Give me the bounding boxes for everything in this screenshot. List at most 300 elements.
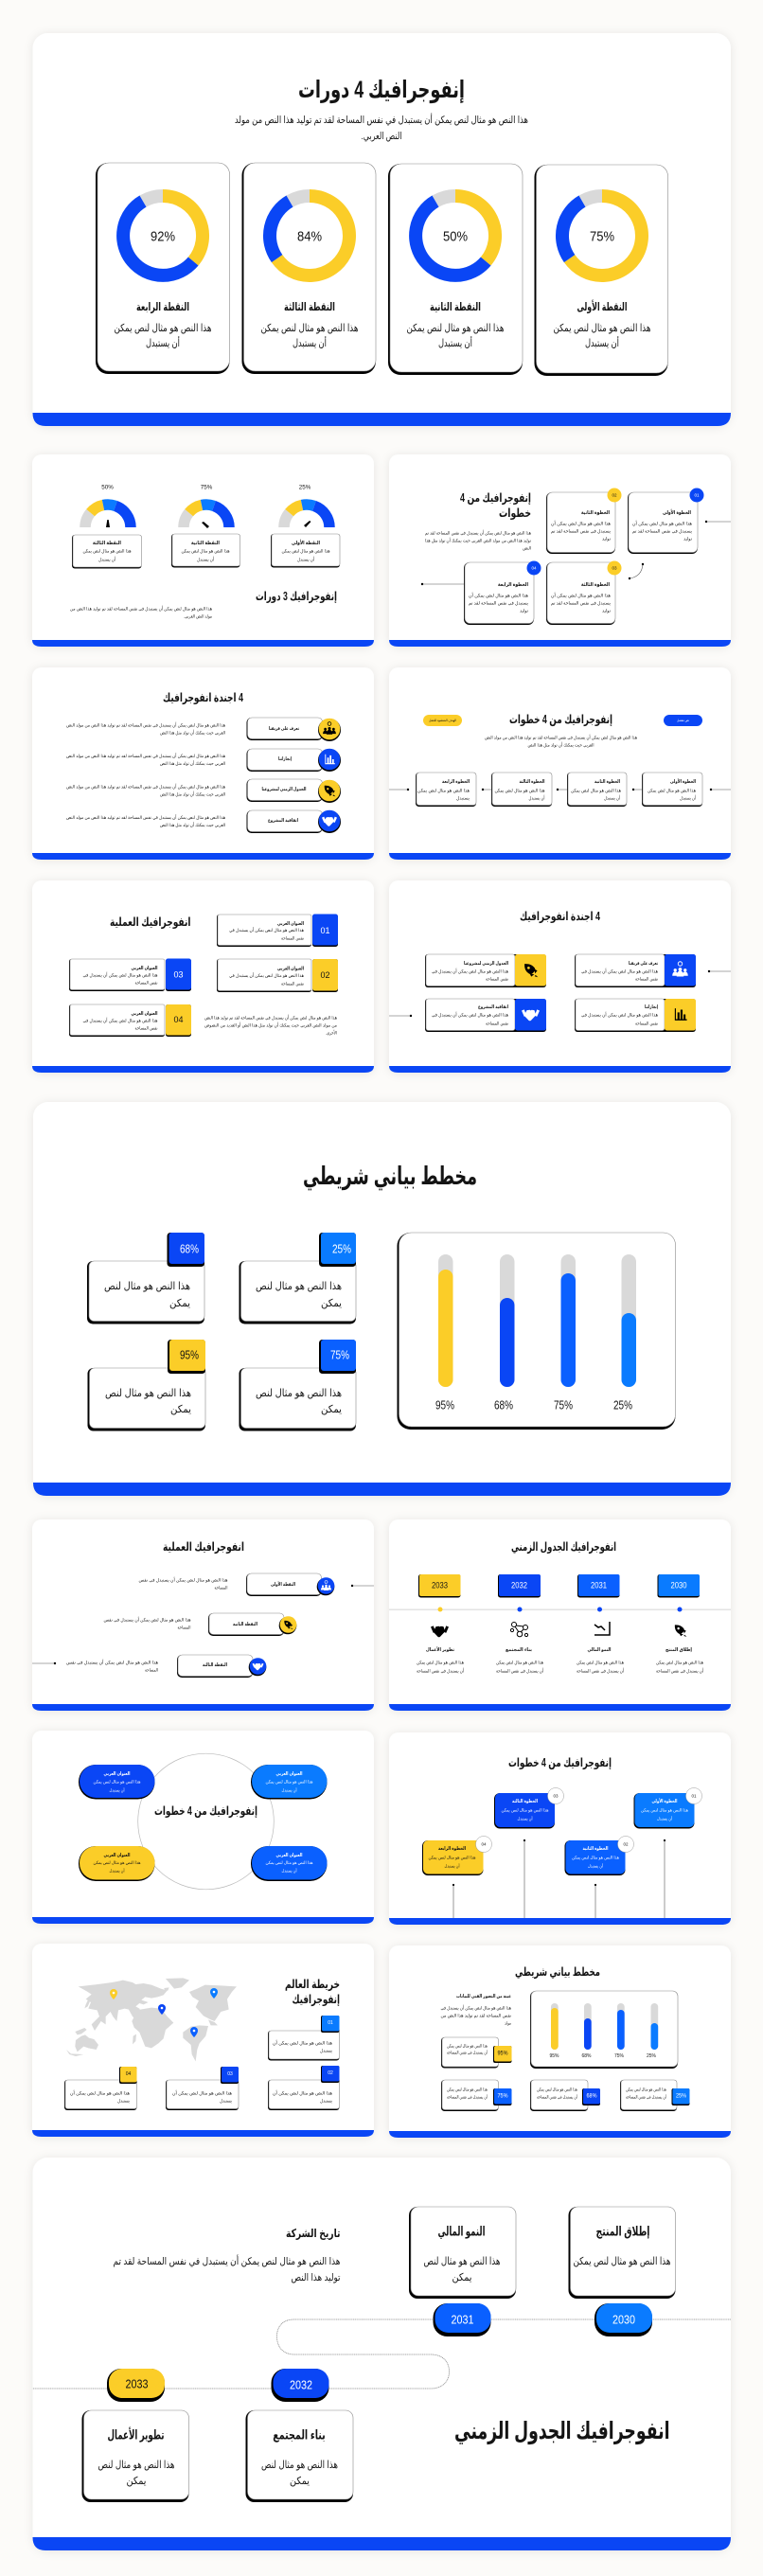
icon: network	[510, 1623, 528, 1637]
item 01: 01	[320, 926, 330, 935]
step card 01: 01	[694, 492, 700, 498]
bar chart card: 75%	[614, 2053, 624, 2059]
stat 25%	[620, 2080, 689, 2111]
pill top right: هذا النص هو مثال لنص يمكن	[265, 1780, 313, 1784]
map card 01	[268, 2016, 339, 2060]
panel: circle 4 steps	[32, 1731, 374, 1924]
stat 95%: أن يستبدل في نفس المساحة	[447, 2049, 488, 2054]
card: business development: يمكن	[127, 2476, 146, 2487]
step 3: أن يستبدل	[528, 795, 545, 801]
step card 02: 02	[612, 492, 617, 498]
gauge: 75%	[171, 485, 240, 568]
text block: هذا النص هو مثال لنص يمكن أن يستبدل في نفس المساحة لقد تم توليد هذا النص من مولد النص	[485, 735, 637, 740]
panel: small bar chart	[389, 1945, 731, 2138]
step 2: الخطوة الثانية	[594, 779, 620, 785]
step card 01: الخطوة الأولى	[663, 508, 691, 516]
agenda card: team: هذا النص هو مثال لنص يمكن أن يستبدل في	[581, 968, 658, 975]
item 01: هذا النص هو مثال لنص يمكن أن يستبدل في	[229, 927, 304, 933]
step 02	[564, 1837, 634, 1875]
card: fourth point 92%: هذا النص هو مثال لنص يمكن	[114, 323, 212, 334]
row 3: الجدول الزمني لمشروعنا	[261, 787, 307, 792]
year 2030: إطلاق المنتج	[665, 1647, 692, 1653]
step 03	[494, 1787, 564, 1829]
gauge: 75%: هذا النص هو مثال لنص يمكن	[182, 549, 230, 555]
item 04: 04	[173, 1015, 184, 1024]
step 3	[491, 773, 552, 807]
map card 03	[166, 2067, 239, 2110]
bar chart card: 25%	[613, 1397, 632, 1412]
text block	[425, 530, 532, 551]
item 04: هذا النص هو مثال لنص يمكن أن يستبدل في	[83, 1017, 158, 1024]
agenda card: achievements: نفس المساحة	[635, 1021, 658, 1026]
timeline line	[389, 1609, 731, 1610]
year 2031: هذا النص هو مثال لنص يمكن	[577, 1661, 624, 1666]
stat card 95%: يمكن	[170, 1404, 191, 1415]
company history text: تاريخ الشركة	[286, 2227, 341, 2240]
card: third point 84%: أن يستبدل	[293, 336, 327, 349]
step 04	[422, 1837, 492, 1875]
item 01: العنوان العربي	[277, 921, 304, 927]
panel: 4 steps cards	[389, 454, 731, 647]
heading: إنفوجرافيك 3 دورات	[256, 590, 337, 603]
heading: إنفوجرافيك من 4 خطوات	[508, 1756, 612, 1769]
item 02: 02	[320, 970, 330, 980]
item 02: نفس المساحة	[281, 981, 304, 986]
step 01: هذا النص هو مثال لنص يمكن	[641, 1808, 689, 1812]
gauge: 25%	[271, 485, 340, 568]
step card 03: يستبدل في نفس المساحة لقد تم	[551, 600, 612, 606]
step card 03	[546, 560, 621, 625]
panel: staggered 4 steps	[389, 1732, 731, 1925]
pill top left: العنوان العربي	[104, 1771, 131, 1777]
step card 02: توليد	[602, 536, 612, 542]
pill top left: أن يستبدل	[110, 1787, 125, 1793]
pill top right	[251, 1765, 328, 1799]
card: community building: يمكن	[290, 2476, 310, 2487]
item 04: العنوان العربي	[131, 1011, 158, 1017]
map card 03: 03	[227, 2071, 233, 2077]
agenda card: agreement: اتفاقية المشروع	[478, 1004, 508, 1010]
year chip 2031	[434, 2303, 490, 2336]
row 2: إنجازاتنا	[278, 756, 292, 762]
row 1: تعرف على فريقنا	[269, 726, 299, 732]
map card 01: 01	[328, 2020, 333, 2026]
year 2031: أن يستبدل في نفس المساحة	[577, 1668, 625, 1674]
step 04: 04	[481, 1842, 487, 1846]
gauge: 25%: أن يستبدل	[297, 557, 315, 562]
agenda card: schedule: الجدول الزمني لمشروعنا	[464, 961, 508, 967]
card: financial growth: يمكن	[452, 2272, 471, 2283]
text block: توليد هذا النص من مولد النص العربي حيث يمكنك أن تولد مثل هذا	[425, 538, 532, 543]
card: third point 84%: 84%	[297, 229, 322, 244]
gauge: 75%: النقطة الثانية	[191, 541, 220, 546]
year 2032: 2032	[511, 1581, 527, 1590]
year 2030: 2030	[670, 1581, 687, 1590]
card: third point 84%: النقطة الثالثة	[284, 300, 335, 313]
title: إنفوجرافيك 4 دورات	[298, 77, 465, 104]
step 4: هذا النص هو مثال لنص يمكن	[417, 788, 470, 793]
card: fourth point 92%: 92%	[151, 229, 175, 244]
text block: هذا النص هو مثال لنص يمكن أن يستبدل في	[441, 2005, 511, 2011]
stat card 25%: يمكن	[321, 1298, 342, 1309]
stat card 25%	[239, 1233, 356, 1324]
step 4: يستبدل	[456, 795, 470, 801]
gauge: 50%	[72, 485, 142, 568]
step 3: هذا النص هو مثال لنص يمكن	[494, 788, 545, 793]
step 2: أن يستبدل	[604, 795, 621, 801]
pill top left	[79, 1765, 155, 1799]
card: first point 75%: أن يستبدل	[585, 336, 619, 349]
year chip 2031: 2031	[451, 2312, 473, 2327]
stat 95%: 95%	[498, 2051, 508, 2056]
card: second point 50%	[388, 164, 523, 375]
stat card 95%	[87, 1340, 205, 1431]
card: product launch: إطلاق المنتج	[596, 2225, 649, 2238]
step card 02: هذا النص هو مثال لنص يمكن أن	[551, 521, 611, 526]
card: community building: هذا النص هو مثال لنص	[261, 2460, 338, 2471]
gauge: 50%: 50%	[101, 485, 114, 490]
stat 95%: هذا النص هو مثال لنص يمكن	[447, 2043, 488, 2049]
step card 03: توليد	[602, 608, 612, 613]
bar chart card: 95%	[435, 1397, 454, 1412]
card: second point 50%: أن يستبدل	[438, 336, 472, 349]
bar chart card: 68%	[494, 1397, 513, 1412]
stat 68%	[530, 2080, 600, 2111]
step 01	[634, 1787, 702, 1829]
step 1: هذا النص هو مثال لنص يمكن	[648, 788, 696, 793]
stat 68%: 68%	[587, 2094, 597, 2100]
card: second point 50%: النقطة الثانية	[430, 300, 481, 313]
card: fourth point 92%: أن يستبدل	[146, 336, 180, 349]
year 2033: هذا النص هو مثال لنص يمكن	[417, 1661, 464, 1666]
agenda card: schedule	[425, 954, 546, 987]
bar chart card: 95%	[549, 2053, 559, 2059]
card: community building	[246, 2410, 353, 2502]
card: third point 84%	[242, 163, 376, 374]
bar chart card: 68%	[581, 2053, 592, 2059]
map card 04: هذا النص هو مثال لنص يمكن أن	[70, 2090, 130, 2096]
gauge: 25%: 25%	[299, 485, 311, 490]
gauge: 75%: 75%	[201, 485, 212, 490]
stat 68%: هذا النص هو مثال لنص يمكن	[537, 2087, 577, 2092]
row 3: هذا النص هو مثال لنص يمكن أن يستبدل في نفس المساحة لقد تم توليد هذا النص من مولد النص	[66, 784, 225, 790]
agenda card: agreement: نفس المساحة	[486, 1021, 508, 1026]
year 2032: أن يستبدل في نفس المساحة	[496, 1668, 544, 1674]
world map	[66, 1978, 237, 2061]
step 02: 02	[623, 1842, 629, 1846]
card: product launch: هذا النص هو مثال لنص يمكن	[574, 2256, 671, 2267]
year chip 2030: 2030	[612, 2312, 635, 2327]
process item 3: النقطة الثالثة	[203, 1662, 227, 1668]
year 2032: هذا النص هو مثال لنص يمكن	[496, 1661, 543, 1666]
pill bottom left: أن يستبدل	[110, 1867, 125, 1873]
stat card 75%: هذا النص هو مثال لنص	[256, 1388, 342, 1399]
process item 2: المساحة	[178, 1625, 191, 1630]
step 04: الخطوة الرابعة	[438, 1846, 466, 1852]
item 04	[69, 1004, 191, 1037]
row 3	[66, 779, 341, 803]
title: انفوجرافيك الجدول الزمني	[454, 2418, 670, 2445]
row 4: هذا النص هو مثال لنص يمكن أن يستبدل في نفس المساحة لقد تم توليد هذا النص من مولد النص	[66, 814, 225, 821]
item 03	[69, 958, 191, 991]
row 1: هذا النص هو مثال لنص يمكن أن يستبدل في نفس المساحة لقد تم توليد هذا النص من مولد النص	[66, 721, 225, 729]
step 1: أن يستبدل	[680, 795, 697, 801]
card: first point 75%: النقطة الأولى	[577, 299, 627, 314]
map card 03: هذا النص هو مثال لنص يمكن أن	[172, 2090, 232, 2096]
agenda card: team: تعرف على فريقنا	[629, 961, 658, 967]
step card 04: يستبدل في نفس المساحة لقد تم	[469, 600, 529, 606]
stat 25%: أن يستبدل في نفس المساحة	[626, 2094, 667, 2100]
subtitle	[235, 113, 528, 142]
bar chart card	[530, 1991, 678, 2069]
map card 02: هذا النص هو مثال لنص يمكن أن	[273, 2090, 332, 2096]
connectors	[389, 970, 731, 1017]
stat card 95%: هذا النص هو مثال لنص	[105, 1388, 191, 1399]
year chip 2032: 2032	[290, 2378, 312, 2391]
map card 04	[64, 2067, 136, 2110]
stat card 75%: يمكن	[321, 1404, 342, 1415]
item 03: هذا النص هو مثال لنص يمكن أن يستبدل في	[83, 971, 158, 979]
text block: هذا النص هو مثال لنص يمكن أن يستبدل في نفس المساحة لقد تم توليد هذا النص من	[70, 606, 212, 612]
pill top left: هذا النص هو مثال لنص يمكن	[93, 1780, 141, 1784]
agenda card: achievements: إنجازاتنا	[645, 1004, 658, 1010]
card: second point 50%: هذا النص هو مثال لنص يمكن	[407, 323, 505, 334]
process item 1: النقطة الأولى	[271, 1581, 295, 1588]
heading: إنفوجرافيك	[292, 1993, 340, 2006]
card: fourth point 92%: النقطة الرابعة	[136, 300, 189, 313]
text block: مولد النص العربي.	[184, 613, 212, 619]
step 3: الخطوة الثالثة	[519, 779, 545, 785]
text block: نفس المساحة لقد تم توليد هذا النص من	[441, 2013, 511, 2018]
agenda card: achievements: هذا النص هو مثال لنص يمكن أن يستبدل في	[581, 1011, 658, 1019]
step 03: 03	[553, 1793, 559, 1799]
stat 25%: هذا النص هو مثال لنص يمكن	[626, 2087, 666, 2092]
year 2033: تطوير الأعمال	[426, 1646, 454, 1653]
panel: 4 donut cycles	[32, 33, 731, 426]
text block: من مولد النص العربي حيث يمكنك أن تولد مثل هذا النص أو العديد من النصوص	[204, 1022, 337, 1028]
map card 02: يستبدل	[320, 2098, 333, 2104]
step card 03: الخطوة الثالثة	[581, 582, 610, 588]
year 2031	[577, 1574, 625, 1674]
heading: انفوجرافيك العملية	[163, 1540, 244, 1554]
agenda card: agreement: هذا النص هو مثال لنص يمكن أن يستبدل في	[432, 1011, 508, 1019]
step card 04	[464, 560, 541, 625]
step 04: أن يستبدل	[445, 1863, 460, 1869]
process item 2	[104, 1613, 296, 1636]
subtitle: هذا النص هو مثال لنص يمكن أن يستبدل في نفس المساحة لقد تم توليد هذا النص من مولد	[235, 113, 528, 126]
panel: agenda with icons	[32, 667, 374, 860]
card: first point 75%	[534, 165, 668, 376]
step 02: أن يستبدل	[588, 1863, 604, 1869]
panel: 4 steps row	[389, 667, 731, 860]
stat card 68%: يمكن	[169, 1298, 190, 1309]
text block: النص	[523, 545, 531, 551]
map pins	[110, 1988, 218, 2037]
heading: انفوجرافيك الجدول الزمني	[511, 1540, 616, 1554]
text block: هذا النص هو مثال لنص يمكن أن يستبدل في نفس المساحة لقد تم	[425, 530, 531, 536]
process item 1: المساحة	[214, 1585, 227, 1590]
text block: العربي حيث يمكنك أن تولد مثل هذا النص	[528, 742, 594, 748]
agenda card: agreement	[425, 999, 546, 1032]
heading: انفوجرافيك العملية	[110, 915, 191, 929]
blue pill: نص مفصل	[677, 719, 689, 722]
card: financial growth: النمو المالي	[437, 2225, 485, 2238]
panel: large bar chart	[33, 1102, 731, 1496]
map card 02	[268, 2066, 339, 2110]
step card 01: يستبدل في نفس المساحة لقد تم	[632, 528, 693, 534]
pill bottom right	[251, 1846, 328, 1881]
item 03: 03	[173, 969, 184, 979]
heading: إنفوجرافيك من 4	[460, 491, 531, 505]
step card 04: 04	[531, 566, 537, 570]
title: مخطط بياني شريطي	[303, 1162, 477, 1191]
panel: process infographic numbered	[32, 880, 374, 1073]
year 2031: النمو المالي	[587, 1647, 612, 1653]
item 03: العنوان العربي	[131, 966, 158, 971]
panel: timeline with year boxes	[389, 1519, 731, 1711]
heading: إنفوجرافيك من 4 خطوات	[154, 1804, 257, 1818]
connectors	[32, 1585, 374, 1664]
stat 25%: 25%	[676, 2094, 687, 2100]
year 2033	[417, 1574, 465, 1674]
timeline path	[32, 2319, 731, 2389]
card: business development: هذا النص هو مثال لنص	[98, 2460, 175, 2471]
text block	[204, 1015, 337, 1036]
map card 04: يستبدل	[117, 2098, 131, 2104]
gauge: 50%: النقطة الثالثة	[93, 541, 121, 546]
item 03: نفس المساحة	[134, 981, 157, 986]
year 2031: 2031	[591, 1581, 607, 1590]
pill bottom left: هذا النص هو مثال لنص يمكن	[93, 1860, 141, 1865]
heading	[285, 1978, 340, 2006]
stat 75%	[441, 2080, 511, 2111]
company history text: توليد هذا النص	[292, 2272, 341, 2283]
process item 3	[66, 1655, 266, 1678]
map card 03: يستبدل	[220, 2098, 233, 2104]
year chip 2033	[107, 2369, 165, 2402]
year 2033: أن يستبدل في نفس المساحة	[417, 1668, 465, 1674]
row 3: العربي حيث يمكنك أن تولد مثل هذا النص	[160, 791, 225, 797]
stat card 68%: هذا النص هو مثال لنص	[104, 1281, 190, 1292]
step 01: 01	[691, 1793, 697, 1799]
bar chart card	[398, 1233, 676, 1430]
bar chart card: 25%	[647, 2053, 656, 2059]
card: second point 50%: 50%	[443, 229, 468, 244]
bar chart card: 75%	[554, 1397, 573, 1412]
stat card 68%: 68%	[180, 1242, 199, 1255]
item 02	[217, 959, 338, 992]
pill bottom right: أن يستبدل	[282, 1867, 297, 1873]
card: financial growth: هذا النص هو مثال لنص	[424, 2256, 501, 2267]
gauge: 75%: أن يستبدل	[197, 557, 215, 562]
process item 3: المساحة	[145, 1668, 158, 1674]
company history text: هذا النص هو مثال لنص يمكن أن يستبدل في نفس المساحة لقد تم	[114, 2254, 341, 2267]
gauge: 25%: هذا النص هو مثال لنص يمكن	[282, 549, 330, 555]
year 2030	[656, 1574, 704, 1674]
row 2: العربي حيث يمكنك أن تولد مثل هذا النص	[160, 760, 225, 767]
icon: growth chart	[594, 1622, 610, 1635]
row 1: العربي حيث يمكنك أن تولد مثل هذا النص	[160, 729, 225, 737]
step card 01: توليد	[683, 536, 693, 542]
card: financial growth	[409, 2207, 516, 2299]
item 02: هذا النص هو مثال لنص يمكن أن يستبدل في	[229, 972, 304, 979]
pill bottom left: العنوان العربي	[104, 1853, 131, 1858]
text block: الأخرى.	[326, 1030, 337, 1036]
year 2032: بناء المجتمع	[506, 1647, 532, 1653]
step card 04: توليد	[520, 608, 529, 613]
item 02: العنوان العربي	[277, 966, 304, 971]
step 04: هذا النص هو مثال لنص يمكن	[428, 1856, 476, 1859]
process item 1: هذا النص هو مثال لنص يمكن أن يستبدل في نفس	[138, 1577, 228, 1583]
row 4	[66, 810, 341, 833]
step card 03: هذا النص هو مثال لنص يمكن أن	[551, 593, 611, 598]
step card 01: هذا النص هو مثال لنص يمكن أن	[632, 521, 692, 526]
connectors	[421, 521, 731, 585]
text block	[441, 1994, 511, 2026]
card: business development	[81, 2410, 189, 2502]
text block: عينة من التصور الفني للبيانات	[456, 1994, 511, 1999]
item 04: نفس المساحة	[134, 1026, 157, 1032]
step card 02: الخطوة الثانية	[581, 510, 610, 516]
step card 04: الخطوة الرابعة	[498, 582, 528, 588]
pill bottom right: العنوان العربي	[276, 1853, 303, 1858]
step card 04: هذا النص هو مثال لنص يمكن أن	[469, 593, 528, 598]
year 2030: هذا النص هو مثال لنص يمكن	[656, 1661, 703, 1666]
row 2: هذا النص هو مثال لنص يمكن أن يستبدل في نفس المساحة لقد تم توليد هذا النص من مولد النص	[66, 753, 225, 759]
heading: مخطط بياني شريطي	[515, 1965, 600, 1979]
heading: 4 اجندة انفوجرافيك	[163, 691, 243, 704]
yellow pill: الهدف المنشود للعمل	[429, 719, 456, 722]
card: first point 75%: هذا النص هو مثال لنص يمكن	[553, 323, 651, 334]
panel: world map	[32, 1944, 374, 2137]
stat card 75%	[239, 1340, 356, 1431]
gauge: 50%: أن يستبدل	[98, 557, 116, 562]
pill bottom right: هذا النص هو مثال لنص يمكن	[265, 1860, 313, 1865]
circle outline	[138, 1753, 274, 1890]
stat card 95%: 95%	[180, 1348, 199, 1361]
step 4	[416, 773, 476, 807]
row 1	[66, 718, 341, 741]
vertical connectors	[452, 1839, 665, 1918]
step 01: الخطوة الأولى	[651, 1798, 678, 1804]
stat card 75%: 75%	[330, 1348, 349, 1361]
heading: إنفوجرافيك من 4 خطوات	[509, 713, 612, 726]
process item 2: النقطة الثانية	[233, 1622, 257, 1627]
panel: process with circles	[32, 1519, 374, 1711]
step 02: الخطوة الثانية	[583, 1846, 609, 1852]
card: product launch	[568, 2207, 676, 2299]
step card 03: 03	[612, 566, 617, 570]
panel: agenda cards	[389, 880, 731, 1073]
card: third point 84%: هذا النص هو مثال لنص يمكن	[261, 323, 359, 334]
blue pill	[664, 715, 702, 726]
card: community building: بناء المجتمع	[273, 2427, 326, 2443]
pill bottom left	[79, 1846, 155, 1881]
step 4: الخطوة الرابعة	[442, 779, 470, 785]
step 1: الخطوة الأولى	[670, 778, 696, 785]
item 01: نفس المساحة	[281, 935, 304, 941]
step 02: هذا النص هو مثال لنص يمكن	[572, 1856, 620, 1859]
step 2	[567, 773, 627, 807]
process item 3: هذا النص هو مثال لنص يمكن أن يستبدل في نفس	[66, 1659, 158, 1666]
agenda card: team	[575, 954, 696, 987]
step card 02: يستبدل في نفس المساحة لقد تم	[551, 528, 612, 534]
text block	[70, 606, 212, 619]
year chip 2032	[271, 2369, 329, 2402]
stat 95%	[441, 2037, 511, 2068]
map card 02: 02	[328, 2070, 333, 2076]
panel: 3 gauges	[32, 454, 374, 647]
